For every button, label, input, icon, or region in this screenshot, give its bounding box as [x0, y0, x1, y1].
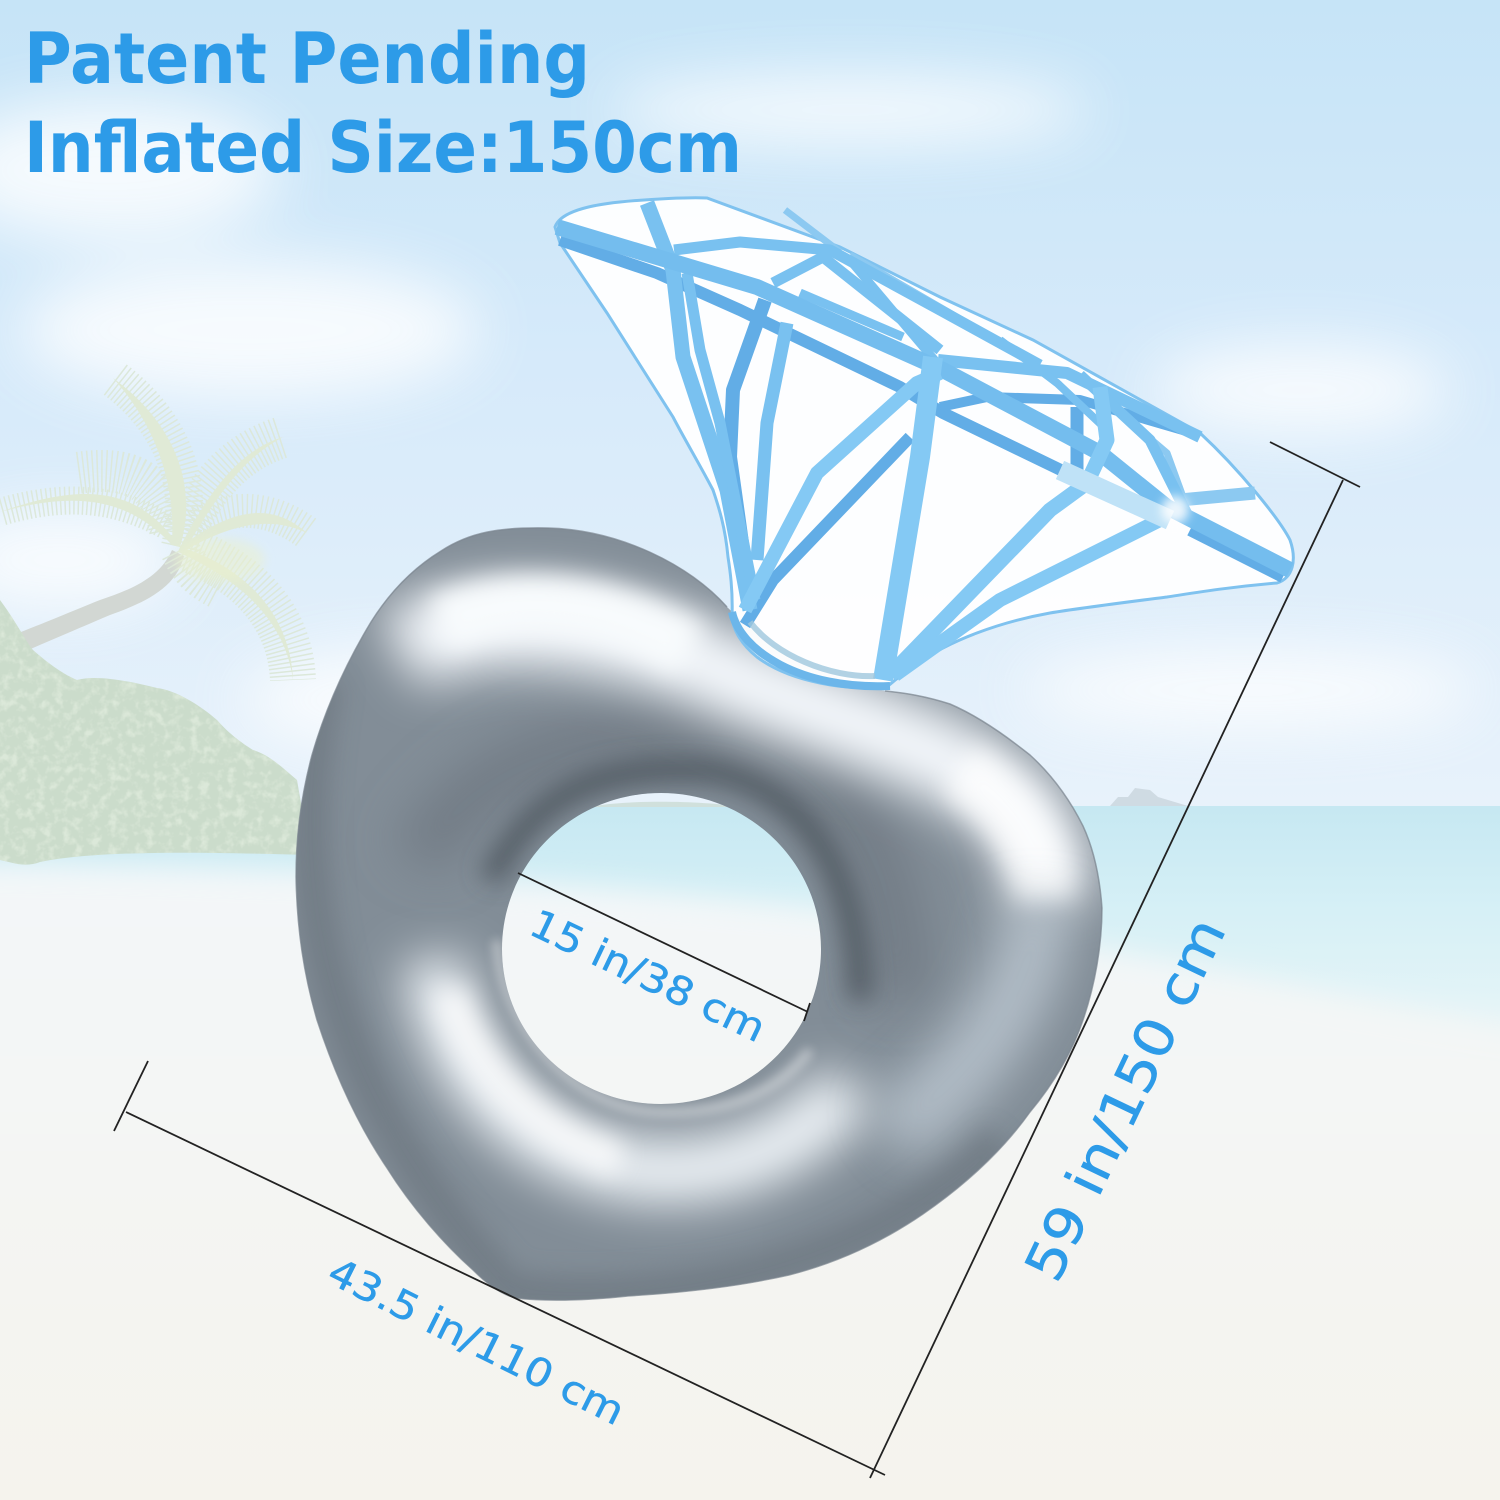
- bushes: [0, 600, 310, 865]
- dimension: hole 15 in/38 cm: 15 in/38 cm: [523, 901, 772, 1052]
- heart-shaped ring float: [280, 510, 1120, 1310]
- title: Inflated Size:150cm: [24, 107, 742, 189]
- dimension: height 59 in/150 cm: [870, 442, 1360, 1478]
- dimension: width 43.5 in/110 cm: 43.5 in/110 cm: [321, 1250, 631, 1435]
- dimension: width 43.5 in/110 cm: [114, 1061, 885, 1475]
- dimension: hole 15 in/38 cm: [518, 873, 810, 1052]
- distant yacht: [1110, 788, 1188, 806]
- dimension: height 59 in/150 cm: 59 in/150 cm: [1014, 909, 1238, 1291]
- title: Patent Pending: [24, 18, 590, 100]
- palm tree: [0, 378, 307, 680]
- distant island seen through ring hole: [590, 802, 740, 807]
- title: [24, 18, 742, 189]
- diamond gemstone: [555, 198, 1293, 688]
